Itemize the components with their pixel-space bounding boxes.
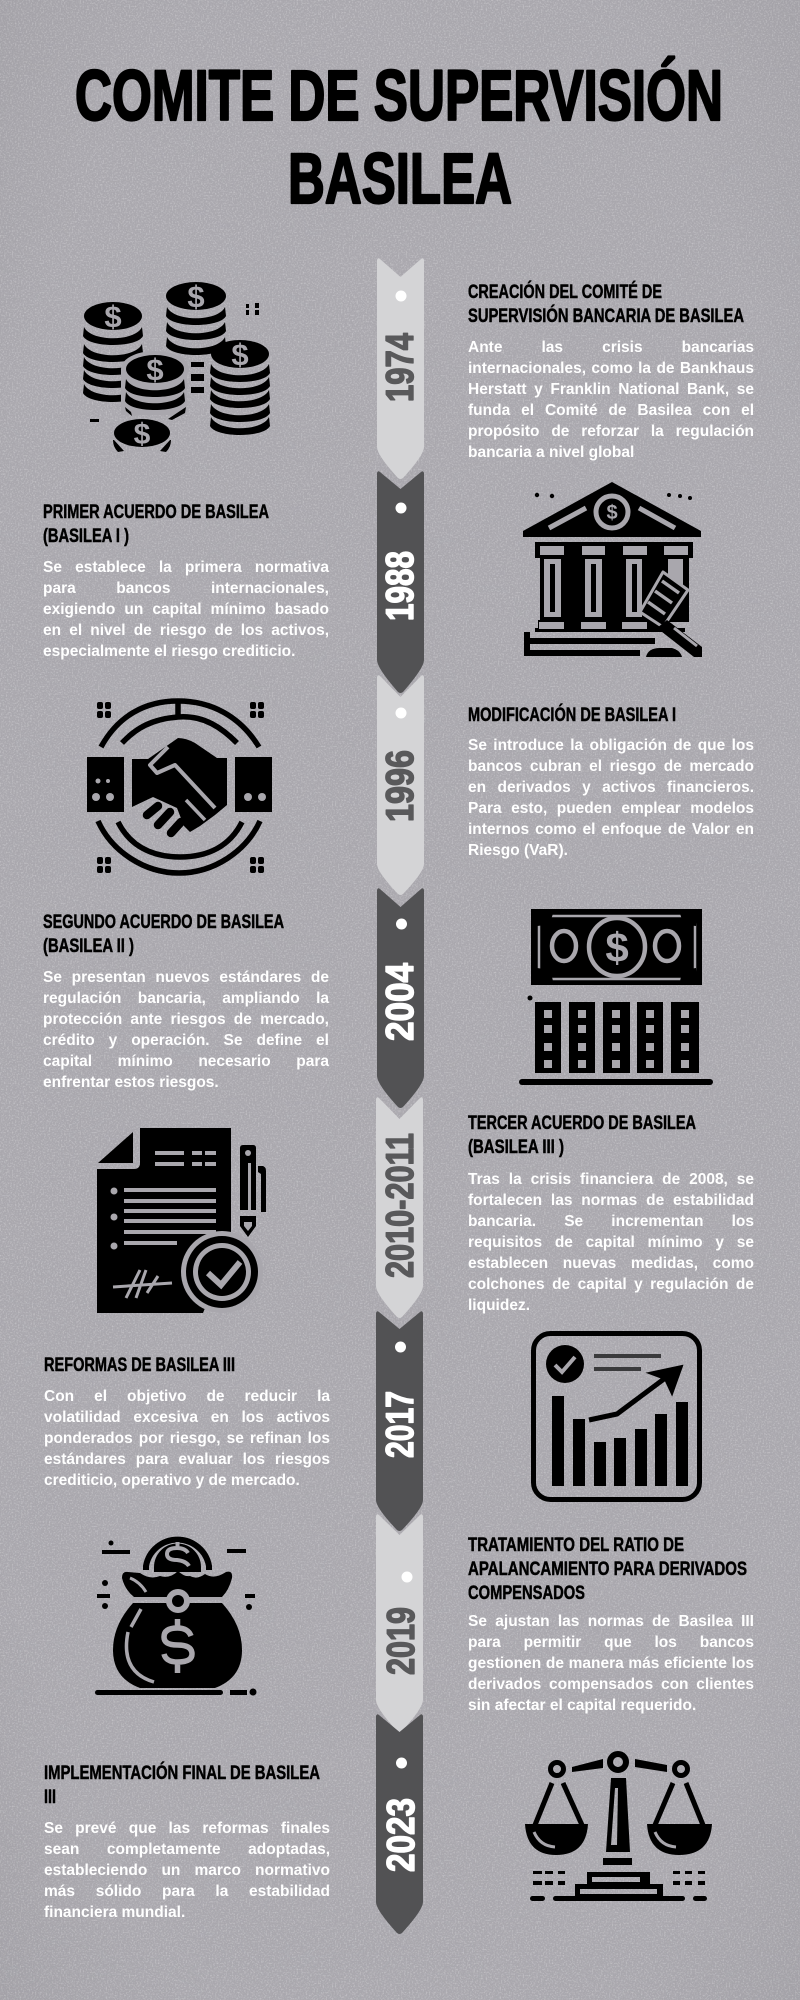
text: segundo acuerdo: enfrentar estos riesgos.	[43, 1074, 219, 1091]
text: creación del comité: internacionales, como la de Bankhaus	[468, 360, 754, 377]
text: creación del comité: Ante las crisis bancarias	[468, 339, 754, 356]
heading: primer acuerdo: PRIMER ACUERDO DE BASILEA	[43, 501, 269, 523]
icon: bank with gavel	[523, 482, 702, 657]
segment 2017	[376, 1311, 423, 1531]
text: ratio de apalancamiento: Se ajustan las normas de Basilea III	[468, 1613, 754, 1630]
text: segundo acuerdo: Se presentan nuevos estándares de	[43, 969, 329, 986]
text: reformas: crediticio, operativo y de mercado.	[44, 1472, 300, 1489]
panel: 1996 modificación de basilea I	[468, 702, 754, 859]
text: tercer acuerdo: requisitos de capital mínimo y se	[468, 1234, 754, 1251]
segment 1988	[377, 471, 424, 693]
heading: segundo acuerdo: SEGUNDO ACUERDO DE BASILEA	[43, 911, 284, 933]
heading: reformas: REFORMAS DE BASILEA III	[44, 1354, 235, 1376]
icon: balance scales	[525, 1754, 712, 1901]
segment 2010-2011: 2010-2011	[379, 1133, 422, 1278]
icon: money bag	[95, 1540, 256, 1696]
icon: banknote and columns: $	[605, 924, 629, 971]
segment 2019	[376, 1514, 423, 1732]
text: ratio de apalancamiento	[468, 1613, 754, 1714]
segment 1996: 1996	[379, 750, 422, 822]
text: tercer acuerdo: Tras la crisis financiera de 2008, se	[468, 1171, 754, 1188]
text: modificación: Para esto, pueden emplear modelos	[468, 800, 754, 817]
text: creación del comité: bancaria a nivel global	[468, 444, 634, 461]
heading: segundo acuerdo: (BASILEA II )	[43, 935, 134, 957]
icon: signed document	[97, 1128, 266, 1313]
text: tercer acuerdo	[468, 1171, 754, 1314]
heading: primer acuerdo	[43, 501, 269, 547]
text: implementación final: Se prevé que las reformas finales	[44, 1820, 330, 1837]
segment 2004	[377, 888, 424, 1108]
text: tercer acuerdo: establecen nuevas medidas, como	[468, 1255, 754, 1272]
text: implementación final: financiera mundial.	[44, 1904, 185, 1921]
text: primer acuerdo	[43, 559, 330, 660]
heading: creación del comité: CREACIÓN DEL COMITÉ DE	[468, 279, 662, 303]
text: implementación final: sean completamente adoptadas,	[44, 1841, 330, 1858]
heading: tercer acuerdo: (BASILEA III )	[468, 1136, 564, 1158]
icon: bank with gavel: $	[606, 502, 618, 524]
text: segundo acuerdo: crédito y operación. Se define el	[43, 1032, 329, 1049]
panel: 2010-2011 tercer acuerdo	[468, 1112, 754, 1314]
text: primer acuerdo: exigiendo un capital mínimo basado	[43, 601, 329, 618]
icon: coin stacks: $	[231, 337, 249, 372]
panel: 2019 ratio de apalancamiento	[468, 1534, 754, 1714]
text: reformas: Con el objetivo de reducir la	[44, 1388, 330, 1405]
icon: coin stacks: $	[187, 279, 205, 314]
text: primer acuerdo: para bancos internacionales,	[43, 580, 329, 597]
text: creación del comité: funda el Comité de Basilea con el	[468, 402, 754, 419]
icon: coin stacks	[83, 279, 270, 452]
text: tercer acuerdo: colchones de capital y regulación de	[468, 1276, 754, 1293]
text: modificación: bancos cubran el riesgo de mercado	[468, 758, 754, 775]
text: modificación	[468, 737, 754, 859]
text: tercer acuerdo: fortalecen las normas de estabilidad	[468, 1192, 754, 1209]
text: segundo acuerdo: capital mínimo necesario para	[43, 1053, 329, 1070]
text: segundo acuerdo: protección ante riesgos de mercado,	[43, 1011, 329, 1028]
heading: implementación final	[44, 1760, 320, 1808]
heading: tercer acuerdo: TERCER ACUERDO DE BASILEA	[468, 1112, 696, 1134]
segment 1988: 1988	[379, 551, 422, 621]
text: implementación final	[44, 1820, 330, 1921]
panel: 2023 implementación final	[44, 1760, 330, 1921]
text: primer acuerdo: en el nivel de riesgo de los activos,	[43, 622, 329, 639]
text: reformas: ponderados por riesgo, se refinan los	[44, 1430, 330, 1447]
text: modificación: en derivados y activos financieros.	[468, 779, 754, 796]
text: reformas: estándares para evaluar los riesgos	[44, 1451, 330, 1468]
segment 2004: 2004	[379, 963, 422, 1041]
heading: segundo acuerdo	[43, 911, 284, 957]
segment 2017: 2017	[379, 1391, 422, 1458]
icon: banknote and columns	[519, 909, 713, 1085]
icon: coin stacks: $	[104, 299, 122, 334]
heading: tercer acuerdo	[468, 1112, 696, 1158]
text: modificación: Se introduce la obligación de que los	[468, 737, 754, 754]
text: implementación final: estableciendo un marco normativo	[44, 1862, 330, 1879]
heading: ratio de apalancamiento: TRATAMIENTO DEL RATIO DE	[468, 1534, 684, 1556]
segment 1996	[377, 675, 424, 895]
heading: primer acuerdo: (BASILEA I )	[43, 525, 129, 547]
title	[75, 57, 723, 219]
panel: 1988 primer acuerdo	[43, 501, 330, 660]
text: creación del comité: propósito de reforzar la regulación	[468, 423, 754, 440]
text: ratio de apalancamiento: gestionen de manera más eficiente los	[468, 1655, 754, 1672]
text: tercer acuerdo: liquidez.	[468, 1297, 530, 1314]
heading: implementación final: III	[44, 1786, 56, 1808]
heading: ratio de apalancamiento: COMPENSADOS	[468, 1582, 585, 1604]
text: modificación: Riesgo (VaR).	[468, 842, 568, 859]
text: primer acuerdo: Se establece la primera normativa	[43, 559, 329, 576]
text: modificación: internos como el enfoque de Valor en	[468, 821, 754, 838]
panel: 2004 segundo acuerdo	[43, 911, 330, 1091]
heading: ratio de apalancamiento	[468, 1534, 747, 1604]
text: creación del comité: Herstatt y Franklin National Bank, se	[468, 381, 754, 398]
text: ratio de apalancamiento: para permitir que los bancos	[468, 1634, 754, 1651]
segment 2023: 2023	[380, 1798, 423, 1872]
icon: coin stacks: $	[134, 418, 151, 451]
heading: modificación: MODIFICACIÓN DE BASILEA I	[468, 702, 676, 726]
text: segundo acuerdo	[43, 969, 330, 1091]
text: reformas	[44, 1388, 330, 1489]
panel: 2017 reformas	[44, 1354, 330, 1489]
text: ratio de apalancamiento: derivados compensados con clientes	[468, 1676, 754, 1693]
icon: bar chart with rising arrow	[534, 1334, 700, 1500]
text: ratio de apalancamiento: sin afectar el capital requerido.	[468, 1697, 696, 1714]
text: segundo acuerdo: regulación bancaria, ampliando la	[43, 990, 329, 1007]
icon: handshake	[87, 700, 272, 873]
timeline ribbon	[376, 258, 424, 1934]
text: primer acuerdo: especialmente el riesgo crediticio.	[43, 643, 295, 660]
heading: implementación final: IMPLEMENTACIÓN FINAL DE BASILEA	[44, 1760, 320, 1784]
text: reformas: volatilidad excesiva en los activos	[44, 1409, 330, 1426]
icon: coin stacks: $	[146, 352, 164, 387]
segment 1974	[377, 258, 424, 479]
segment 1974: 1974	[379, 333, 422, 402]
heading: creación del comité	[468, 279, 744, 327]
text: tercer acuerdo: bancaria. Se incrementan los	[468, 1213, 754, 1230]
segment 2019: 2019	[380, 1607, 423, 1675]
text: creación del comité	[468, 339, 754, 461]
text: implementación final: más sólido para la estabilidad	[44, 1883, 330, 1900]
segment 2023	[376, 1714, 423, 1934]
title: BASILEA	[288, 140, 512, 219]
panel: 1974 creación del comité	[468, 279, 754, 461]
